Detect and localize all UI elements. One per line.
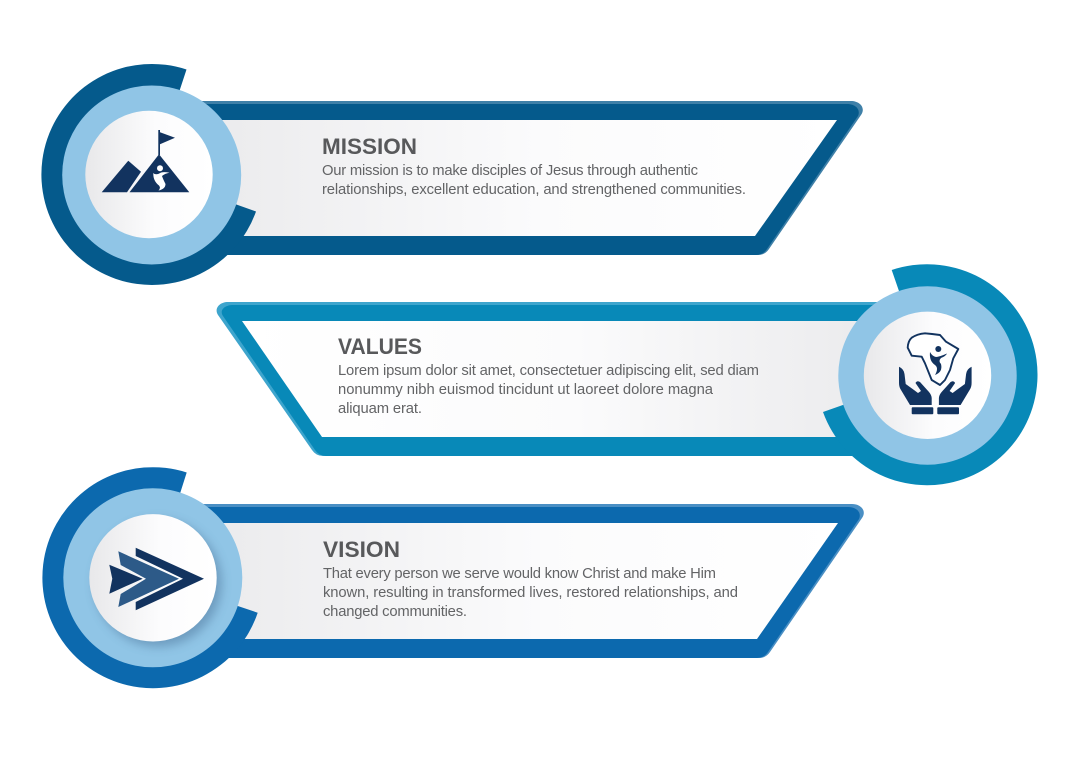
mission text: Our mission is to make disciples of Jesus through authentic	[322, 163, 699, 179]
panel: mission	[41, 64, 863, 285]
mission text: relationships, excellent education, and strengthened communities.	[322, 182, 746, 198]
mission text	[322, 163, 746, 198]
values heading: VALUES	[338, 334, 422, 359]
vision light ring	[63, 488, 242, 667]
vision circle shadow	[94, 519, 222, 647]
values band	[217, 302, 910, 456]
icon: mountain with flag and climber	[102, 130, 189, 192]
panel: vision	[42, 467, 864, 688]
mission light ring	[62, 86, 241, 264]
values outer ring arc	[823, 264, 1038, 485]
values text: Lorem ipsum dolor sit amet, consectetuer adipiscing elit, sed diam	[338, 363, 759, 379]
vision band	[170, 504, 864, 658]
mission band	[170, 101, 863, 255]
values text: nonummy nibh euismod tincidunt ut laoreet dolore magna	[338, 382, 714, 398]
vision inner circle	[89, 514, 217, 642]
values light ring	[838, 286, 1017, 465]
mission outer ring arc	[41, 64, 256, 285]
icon: hands holding Africa	[899, 333, 972, 414]
vision text	[323, 566, 738, 620]
panel: values	[217, 264, 1038, 485]
values text	[338, 363, 759, 417]
vision text: That every person we serve would know Christ and make Him	[323, 566, 716, 582]
mission heading: MISSION	[322, 134, 417, 159]
mission inner circle	[85, 111, 213, 238]
vision text: changed communities.	[323, 604, 467, 620]
values text: aliquam erat.	[338, 401, 422, 417]
vision heading: VISION	[323, 537, 400, 562]
values inner circle	[864, 312, 991, 439]
icon: triple arrows	[109, 548, 204, 610]
vision outer ring arc	[42, 467, 258, 688]
vision text: known, resulting in transformed lives, restored relationships, and	[323, 585, 738, 601]
